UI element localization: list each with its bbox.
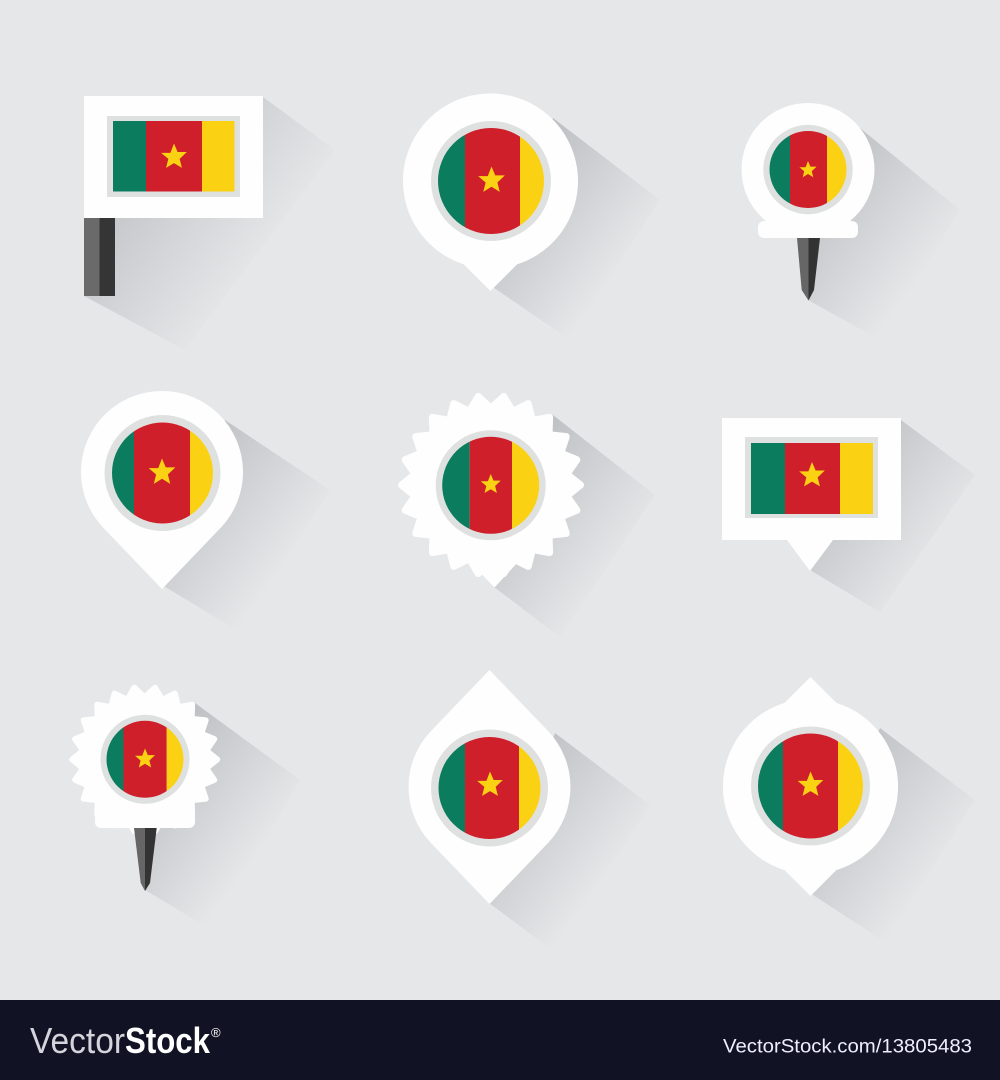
logo: VectorStock: Vector (30, 1020, 125, 1061)
icon: starburst push pin (69, 684, 284, 910)
flag ring (104, 415, 220, 531)
image id: VectorStock.com/13805483 (723, 1037, 972, 1058)
pin head (742, 103, 874, 236)
logo: VectorStock: ® (211, 1025, 221, 1040)
icon: circle pin with two points (723, 677, 962, 926)
long shadow (490, 118, 660, 340)
round flag (438, 128, 544, 234)
badge pointer (470, 562, 518, 588)
icon: waving flag on pole (84, 96, 335, 350)
long shadow (145, 703, 300, 932)
icon: starburst badge pin (398, 393, 642, 622)
pin body (723, 677, 898, 896)
needle (797, 238, 820, 300)
round flag (769, 131, 847, 208)
flag ring (751, 726, 870, 846)
badge body (62, 677, 227, 842)
icon: teardrop map pin (81, 391, 312, 614)
pole (84, 218, 115, 296)
flag of Cameroon (751, 443, 873, 514)
white flag panel (84, 96, 263, 218)
long shadow (84, 97, 335, 350)
long shadow (808, 128, 960, 340)
round flag (112, 422, 214, 524)
pin body (409, 670, 570, 904)
long shadow (810, 420, 975, 612)
round flag (106, 720, 185, 798)
flag of Cameroon (113, 121, 234, 192)
flag ring (431, 121, 551, 241)
badge body (389, 384, 593, 586)
long shadow (810, 728, 975, 942)
round flag (758, 733, 863, 839)
pin body (81, 391, 243, 589)
pin base (758, 221, 858, 238)
bubble body (722, 418, 901, 571)
icon: push pin with round head (742, 103, 944, 322)
logo: VectorStock: Stock (125, 1020, 211, 1061)
needle (134, 828, 157, 891)
flag ring (436, 430, 546, 540)
pin base (95, 812, 195, 828)
flag ring (100, 715, 190, 804)
flag frame (107, 116, 240, 197)
long shadow (162, 420, 330, 632)
pin body (403, 93, 578, 291)
flag ring (763, 125, 853, 214)
footer bar (0, 1000, 1000, 1080)
round flag (438, 737, 541, 839)
round flag (442, 436, 540, 534)
flag frame (745, 437, 878, 518)
flag ring (431, 730, 548, 846)
icon: diamond-tipped pin (408, 670, 634, 932)
long shadow (494, 415, 655, 637)
icon: round map pin (403, 94, 646, 322)
icon: speech-bubble flag (722, 418, 975, 612)
long shadow (489, 733, 650, 952)
